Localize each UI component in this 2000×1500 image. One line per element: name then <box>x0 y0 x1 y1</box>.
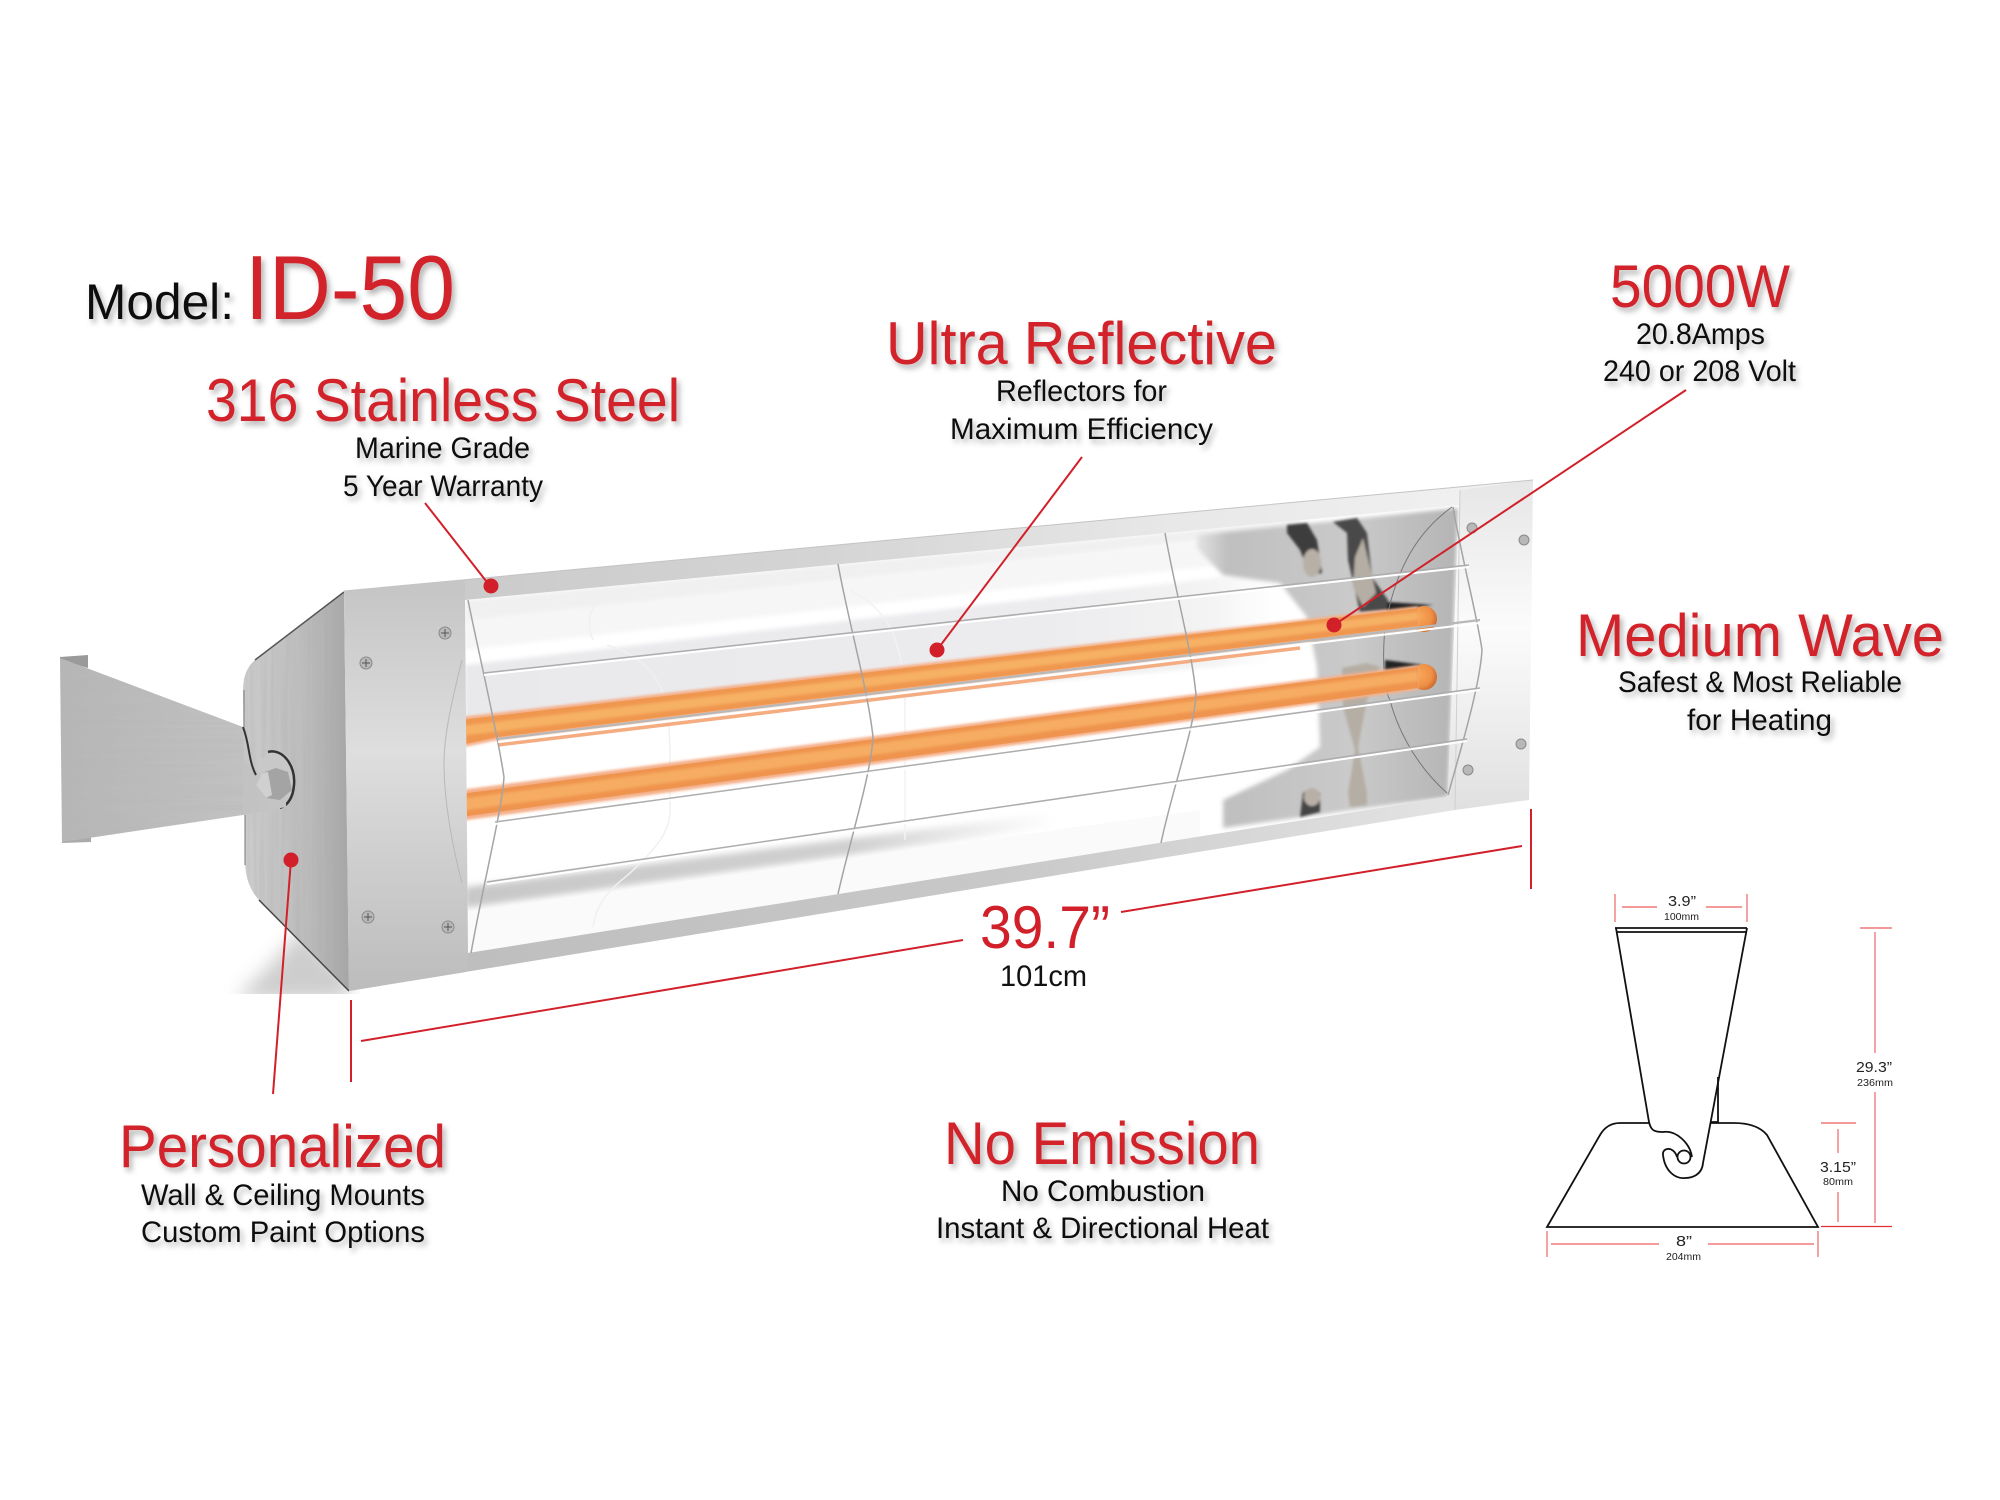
profile drawing <box>1547 928 1818 1227</box>
width label: 100mm <box>1664 912 1699 923</box>
pivot bolt <box>243 727 295 815</box>
floor shadow <box>235 930 349 1000</box>
base width label: 8” <box>1676 1233 1692 1250</box>
heating tube 2 <box>460 664 1437 821</box>
base width label <box>1666 1233 1701 1263</box>
callout: medium wave <box>1576 602 1944 737</box>
callout: power rating: 20.8Amps <box>1636 318 1765 351</box>
callout: ultra reflective: Maximum Efficiency <box>950 413 1213 446</box>
callout: length: 39.7” <box>980 894 1110 961</box>
callout: ultra reflective: Reflectors for <box>996 375 1167 408</box>
base width label: 204mm <box>1666 1252 1701 1263</box>
callout: length: 101cm <box>1000 960 1087 993</box>
callout: 316 stainless steel: 316 Stainless Steel <box>206 367 680 434</box>
reflection of end cap <box>1197 508 1458 828</box>
reflector window <box>466 506 1459 927</box>
callout: length <box>980 894 1110 993</box>
callout: no emission: No Combustion <box>1001 1175 1205 1208</box>
callout: ultra reflective <box>886 310 1277 446</box>
callout: power rating: 5000W <box>1610 253 1790 320</box>
callout: 316 stainless steel <box>206 367 680 503</box>
face screws <box>360 523 1529 933</box>
model title: Model: <box>85 274 234 330</box>
model title <box>85 238 455 339</box>
model title: ID-50 <box>245 238 455 339</box>
leader line: personalized <box>273 852 298 1094</box>
bottom frame rail <box>349 797 1455 991</box>
callout: ultra reflective: Ultra Reflective <box>886 310 1277 377</box>
overall height label <box>1856 1059 1893 1089</box>
callout: 316 stainless steel: Marine Grade <box>355 432 530 465</box>
leader line: 316 stainless steel <box>425 503 498 594</box>
overall height label: 236mm <box>1857 1078 1893 1089</box>
mount height label <box>1820 1159 1856 1188</box>
callout: personalized <box>119 1113 446 1249</box>
callout: personalized: Custom Paint Options <box>141 1216 425 1249</box>
callout: medium wave: Medium Wave <box>1576 602 1944 669</box>
callout: no emission: No Emission <box>944 1110 1260 1177</box>
callout: medium wave: Safest & Most Reliable <box>1618 666 1902 699</box>
width label: 3.9” <box>1668 893 1696 910</box>
top frame rail <box>344 480 1533 600</box>
faint cylinder arcs <box>590 634 670 927</box>
callout: personalized: Wall & Ceiling Mounts <box>141 1179 425 1212</box>
callout: medium wave: for Heating <box>1687 704 1832 737</box>
callout: personalized: Personalized <box>119 1113 446 1180</box>
callout: 316 stainless steel: 5 Year Warranty <box>343 470 543 503</box>
guard wires <box>444 507 1482 953</box>
left face plate <box>344 580 468 991</box>
side profile dimension diagram <box>1547 893 1893 1263</box>
dimension lines <box>1547 894 1892 1257</box>
callout: power rating: 240 or 208 Volt <box>1603 355 1797 388</box>
right end plate <box>1448 480 1533 810</box>
length dimension lines <box>351 809 1531 1082</box>
callout: power rating <box>1603 253 1797 388</box>
overall height label: 29.3” <box>1856 1059 1892 1076</box>
leader line: ultra reflective <box>930 457 1082 658</box>
heater product illustration <box>60 480 1533 1000</box>
width label <box>1664 893 1699 923</box>
callout: no emission <box>936 1110 1270 1245</box>
heating tube 1 <box>460 606 1437 748</box>
mount height label: 80mm <box>1823 1177 1853 1188</box>
leader line: 5000W <box>1326 390 1686 632</box>
wall mount bracket <box>60 655 286 843</box>
side end panel <box>243 592 349 991</box>
callout: no emission: Instant & Directional Heat <box>936 1212 1270 1245</box>
mount height label: 3.15” <box>1820 1159 1856 1176</box>
